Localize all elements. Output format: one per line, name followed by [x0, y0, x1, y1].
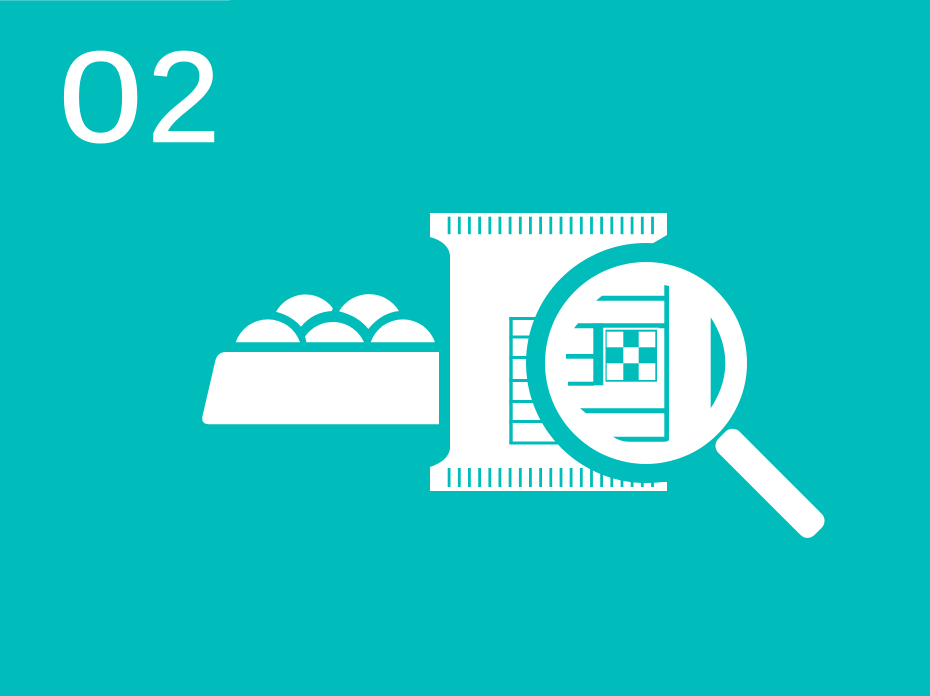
lens ring: [526, 243, 766, 483]
package top perforations: [448, 217, 654, 234]
icon: food package: [430, 213, 667, 491]
package label table: [509, 317, 569, 444]
kibble pile: [236, 294, 435, 342]
heading number: 02: 2: [148, 26, 220, 169]
illustration canvas: [0, 0, 825, 538]
icon: food bowl: [202, 294, 439, 424]
package silhouette: [430, 213, 667, 491]
icon: magnifying glass: [526, 243, 829, 542]
package bottom perforations: [448, 468, 654, 487]
magnified checkerboard seal: [603, 328, 659, 384]
magnifier handle: [711, 425, 829, 542]
heading number: 02: 0: [59, 25, 142, 169]
bowl body: [202, 352, 439, 424]
heading number: 02: [59, 25, 220, 169]
magnified label details: [566, 285, 725, 442]
